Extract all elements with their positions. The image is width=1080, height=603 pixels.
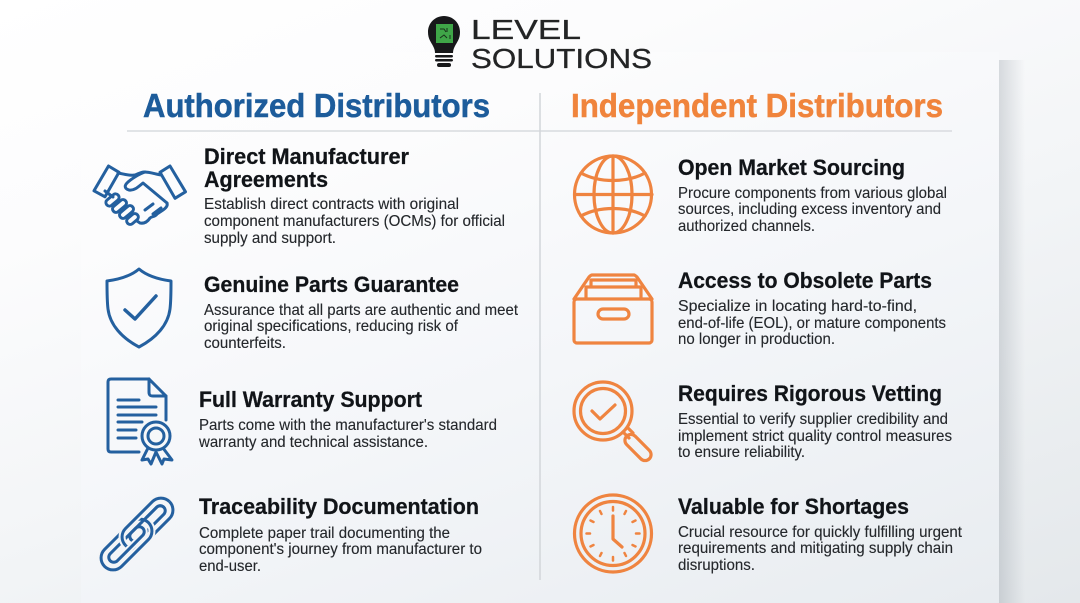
- text: Full Warranty Support: warranty and technical assistance.: [198, 434, 428, 451]
- text: Requires Rigorous Vetting: Requires Rigorous Vetting: [678, 381, 942, 406]
- text: Access to Obsolete Parts: no longer in production.: [678, 331, 835, 348]
- icon: chain link: [100, 496, 174, 572]
- text: Direct Manufacturer Agreements: [204, 144, 505, 247]
- logo: [428, 14, 652, 74]
- heading: Independent Distributors: Independent Distributors: [571, 87, 943, 124]
- icon: magnifier with check: [574, 382, 654, 463]
- text: Full Warranty Support: [198, 387, 497, 451]
- text: Open Market Sourcing: Procure components from various global: [678, 185, 947, 202]
- heading: Authorized Distributors: Authorized Distributors: [143, 87, 490, 124]
- text: Valuable for Shortages: requirements and mitigating supply chain: [678, 540, 953, 557]
- text: Direct Manufacturer Agreements: Establish direct contracts with original: [204, 196, 459, 213]
- logo wordmark: SOLUTIONS: [471, 43, 652, 74]
- text: Traceability Documentation: [199, 494, 482, 575]
- text: Direct Manufacturer Agreements: Direct Manufacturer: [204, 144, 409, 169]
- text: Genuine Parts Guarantee: [204, 272, 519, 352]
- text: Traceability Documentation: component's journey from manufacturer to: [199, 541, 482, 558]
- text: Valuable for Shortages: Crucial resource for quickly fulfilling urgent: [678, 524, 963, 541]
- text: Genuine Parts Guarantee: original specifications, reducing risk of: [204, 318, 459, 335]
- text: Open Market Sourcing: [678, 155, 947, 235]
- text: Traceability Documentation: Traceability Documentation: [199, 494, 479, 519]
- panel: background card: [81, 52, 999, 603]
- icon: clock: [574, 495, 652, 572]
- icon: shield with check: [107, 269, 171, 347]
- text: Open Market Sourcing: Open Market Sourcing: [678, 155, 905, 180]
- text: Valuable for Shortages: Valuable for Shortages: [678, 494, 909, 519]
- text: Access to Obsolete Parts: Access to Obsolete Parts: [678, 268, 932, 293]
- text: Full Warranty Support: Full Warranty Support: [199, 387, 423, 412]
- logo wordmark: [471, 14, 652, 74]
- text: Direct Manufacturer Agreements: component manufacturers (OCMs) for official: [204, 213, 505, 230]
- icon: handshake: [94, 166, 186, 226]
- icon: file box: [574, 275, 652, 343]
- text: Genuine Parts Guarantee: Genuine Parts Guarantee: [204, 272, 459, 297]
- text: Direct Manufacturer Agreements: supply and support.: [204, 230, 336, 247]
- text: Valuable for Shortages: disruptions.: [678, 557, 755, 574]
- text: Access to Obsolete Parts: end-of-life (EOL), or mature components: [678, 315, 946, 332]
- text: Access to Obsolete Parts: Specialize in locating hard-to-find,: [678, 298, 917, 315]
- text: Open Market Sourcing: sources, including excess inventory and: [678, 201, 941, 218]
- text: Genuine Parts Guarantee: counterfeits.: [204, 335, 286, 352]
- text: Direct Manufacturer Agreements: Agreements: [204, 167, 328, 192]
- text: Requires Rigorous Vetting: to ensure reliability.: [678, 444, 805, 461]
- text: Full Warranty Support: Parts come with the manufacturer's standard: [199, 417, 497, 434]
- text: Traceability Documentation: Complete paper trail documenting the: [199, 525, 450, 542]
- text: Traceability Documentation: end-user.: [199, 558, 261, 575]
- icon: globe: [574, 156, 652, 233]
- text: Requires Rigorous Vetting: Essential to verify supplier credibility and: [678, 411, 948, 428]
- icon: light bulb logo: [428, 16, 460, 67]
- text: Valuable for Shortages: [678, 494, 963, 574]
- text: Requires Rigorous Vetting: implement strict quality control measures: [678, 428, 952, 445]
- text: Open Market Sourcing: authorized channels.: [678, 218, 815, 235]
- text: Requires Rigorous Vetting: [678, 381, 952, 461]
- logo wordmark: LEVEL: [471, 14, 581, 45]
- icon: certificate document: [108, 379, 172, 464]
- text: Access to Obsolete Parts: [678, 268, 946, 348]
- text: Genuine Parts Guarantee: Assurance that all parts are authentic and meet: [204, 302, 519, 319]
